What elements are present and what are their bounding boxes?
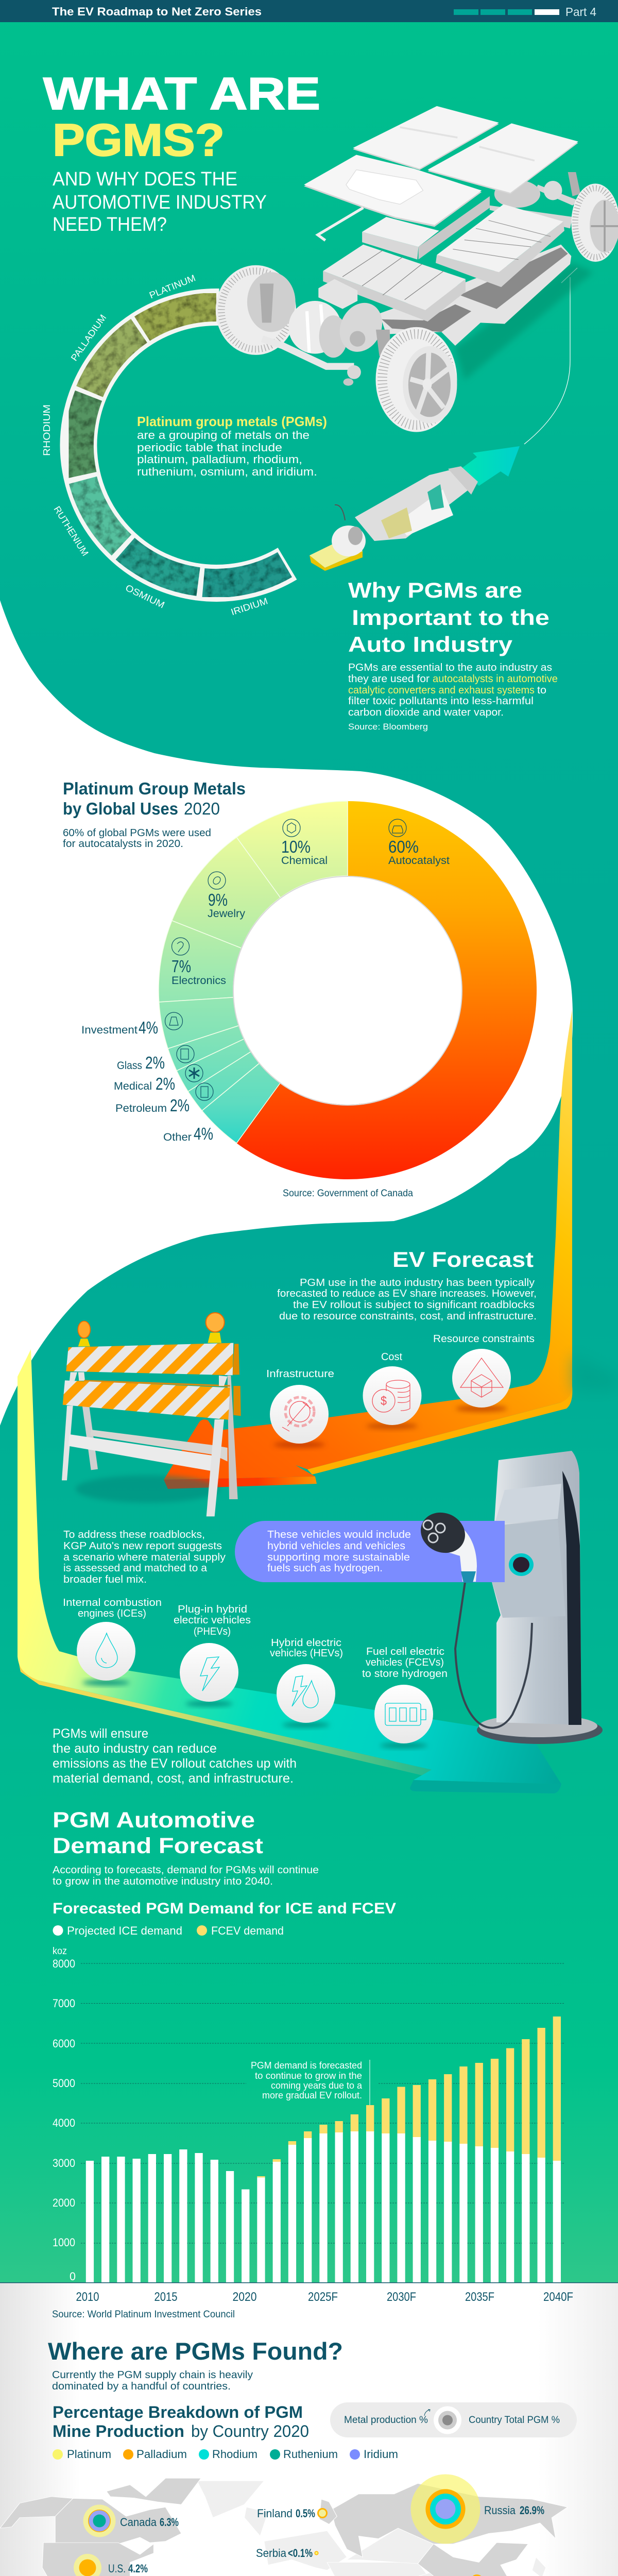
metal labels: IRIDIUM <box>230 596 269 617</box>
slices: other uses <box>159 801 348 1143</box>
bubble: Canada: 6.3% <box>160 2516 179 2529</box>
subtitle: AUTOMOTIVE INDUSTRY <box>53 192 267 213</box>
roadblock: cost <box>363 1351 421 1429</box>
cover panels <box>304 106 578 241</box>
chart annotation <box>251 2060 370 2105</box>
value labels: 10% <box>281 837 311 856</box>
roadblock: resource constraints <box>433 1333 535 1412</box>
body text: why PGMs are important <box>348 662 558 732</box>
highlighted countries <box>0 2478 577 2576</box>
text: address roadblocks: broader fuel mix. <box>63 1574 147 1585</box>
front motor and suspension <box>262 296 391 386</box>
body text: why PGMs are important: filter toxic pollutants into less-harmful <box>348 696 534 707</box>
supply chain text: Currently the PGM supply chain is heavily <box>52 2369 253 2381</box>
metal legend: Rhodium <box>212 2448 258 2461</box>
intro text: what PGMs are <box>137 414 327 478</box>
chart legend: FCEV demand <box>211 1924 284 1937</box>
value labels: 2% <box>170 1096 190 1115</box>
body text: why PGMs are important: Source: Bloomberg <box>348 722 428 732</box>
EV forecast text <box>277 1277 537 1322</box>
text: address roadblocks <box>63 1529 226 1585</box>
x axis labels: 2010 <box>76 2290 99 2304</box>
value labels: Petroleum <box>115 1103 167 1114</box>
y axis labels: 7000 <box>53 1997 75 2010</box>
forecast intro text: According to forecasts, demand for PGMs will continue <box>53 1865 319 1876</box>
text: PGMs will ensure: emissions as the EV rollout catches up with <box>53 1756 297 1771</box>
slice: autocatalyst 60% <box>236 801 537 1179</box>
purple callout: vehicles: supporting more sustainable <box>267 1552 410 1563</box>
body text: why PGMs are important: autocatalysts in automotive <box>433 673 558 685</box>
fuel type: plug-in hybrid: Plug-in hybrid <box>178 1604 247 1615</box>
FCEV bars <box>257 2016 561 2178</box>
bubble: Finland: 0.5% <box>296 2507 315 2520</box>
text: address roadblocks: a scenario where material supply <box>63 1552 226 1563</box>
heading: platinum group metals by use <box>63 779 246 818</box>
chart annotation: coming years due to a <box>271 2080 363 2091</box>
title: PGMS? <box>53 114 225 165</box>
bubble: Russia <box>411 2474 544 2544</box>
heading: platinum group metals by use: by Global Uses <box>63 799 178 818</box>
supply chain text <box>52 2369 253 2392</box>
body text: why PGMs are important: carbon dioxide and water vapor. <box>348 707 504 718</box>
charger plug <box>414 1505 477 1583</box>
metal labels: OSMIUM <box>124 583 166 611</box>
value labels: Chemical <box>281 855 328 867</box>
bubble: Canada: Canada <box>120 2516 157 2529</box>
catalytic converter and arrows <box>310 446 520 571</box>
donut chart: global uses <box>81 801 537 1179</box>
value labels: 2% <box>145 1053 165 1072</box>
x axis labels <box>76 2290 573 2304</box>
x axis labels: 2035F <box>465 2290 494 2304</box>
fuel type: internal combustion engines: engines (ICEs) <box>78 1608 146 1619</box>
EV forecast text: due to resource constraints, cost, and infrastructure. <box>279 1311 537 1322</box>
y axis labels: 6000 <box>53 2037 75 2050</box>
warning lamps <box>78 1313 225 1346</box>
roadblock: cost: Cost <box>381 1351 402 1363</box>
barricade <box>62 1313 241 1516</box>
intro text: what PGMs are: ruthenium, osmium, and iridium. <box>137 465 317 478</box>
icons <box>165 819 406 1100</box>
bubble: Russia: Russia <box>484 2504 516 2517</box>
y axis labels <box>53 1946 76 2283</box>
ribbon: yellow to teal arrow <box>18 1349 561 1793</box>
arrow: teal out <box>461 446 520 486</box>
metal labels: RHODIUM <box>42 404 52 456</box>
bubble: Russia: 26.9% <box>520 2504 544 2517</box>
title: WHAT ARE <box>43 68 320 119</box>
fuel type: hybrid electric: Hybrid electric <box>271 1637 341 1649</box>
heading: why PGMs are important: Important to the <box>352 605 550 630</box>
y axis labels: 3000 <box>53 2157 75 2170</box>
metal labels: PLATINUM <box>148 273 197 301</box>
value labels: 60% <box>388 837 419 856</box>
metal legend: Platinum <box>67 2448 111 2461</box>
forecast intro text <box>53 1865 319 1887</box>
metal labels: RUTHENIUM <box>52 504 91 558</box>
y axis labels: 8000 <box>53 1957 75 1970</box>
text: PGMs will ensure <box>53 1726 297 1786</box>
heading: PGM automotive demand forecast: Demand Forecast <box>53 1834 263 1858</box>
value labels: Glass <box>117 1060 142 1072</box>
fuel type: hybrid electric <box>270 1637 343 1727</box>
progress segments <box>454 9 559 15</box>
value labels: Other <box>163 1131 192 1143</box>
purple callout: vehicles: fuels such as hydrogen. <box>267 1563 383 1574</box>
chart annotation: more gradual EV rollout. <box>262 2090 362 2100</box>
heading: PGM automotive demand forecast <box>53 1808 263 1858</box>
map title: Percentage Breakdown of PGM <box>53 2403 303 2421</box>
fuel type: fuel cell electric: vehicles (FCEVs) <box>366 1657 444 1668</box>
lower section background <box>0 2283 618 2576</box>
heading: why PGMs are important <box>348 578 550 656</box>
bar chart: PGM demand <box>53 1946 564 2283</box>
metal legend: Palladium <box>136 2448 187 2461</box>
x axis labels: 2020 <box>233 2290 256 2304</box>
value labels: 9% <box>208 890 228 909</box>
heading: where are PGMs found: Where are PGMs Found? <box>48 2337 343 2365</box>
metal legend: Ruthenium <box>283 2448 338 2461</box>
donut intro text: for autocatalysts in 2020. <box>63 838 183 850</box>
heading: EV forecast: EV Forecast <box>392 1247 534 1272</box>
y axis labels: 0 <box>70 2270 76 2283</box>
EV forecast text: PGM use in the auto industry has been typically <box>300 1277 535 1289</box>
text: PGMs will ensure: material demand, cost, and infrastructure. <box>53 1771 294 1786</box>
chart annotation: PGM demand is forecasted <box>251 2060 362 2071</box>
forecast intro text: to grow in the automotive industry into 2040. <box>53 1876 273 1887</box>
EV charger <box>455 1451 603 1744</box>
part number: Part 4 <box>565 5 596 19</box>
subtitle: AND WHY DOES THE <box>53 168 237 190</box>
ore ring: six metals <box>42 273 287 617</box>
chart legend: Projected ICE demand <box>67 1924 182 1937</box>
body text: why PGMs are important: to <box>537 685 546 696</box>
chassis illustration <box>216 106 618 432</box>
bubble: U.S.: U.S. <box>108 2562 126 2575</box>
heading: why PGMs are important: Auto Industry <box>348 632 513 656</box>
roadblock: cost: $ <box>381 1394 387 1408</box>
x axis labels: 2040F <box>543 2290 573 2304</box>
value labels: 7% <box>171 957 191 976</box>
fuel type: internal combustion engines <box>63 1597 162 1685</box>
front right wheel <box>375 327 457 432</box>
thin line from chassis to converter <box>524 268 577 444</box>
fuel type: fuel cell electric: to store hydrogen <box>362 1668 448 1680</box>
purple callout: vehicles: These vehicles would include <box>267 1529 411 1540</box>
EV forecast text: the EV rollout is subject to significant roadblocks <box>293 1299 535 1311</box>
converter body <box>332 466 478 556</box>
map title <box>53 2403 309 2441</box>
heading: platinum group metals by use: Platinum Group Metals <box>63 779 246 798</box>
title <box>43 68 320 165</box>
chart source: Source: World Platinum Investment Council <box>52 2309 235 2320</box>
text: PGMs will ensure: PGMs will ensure <box>53 1726 148 1741</box>
bubble: Canada <box>83 2505 179 2537</box>
purple callout: vehicles: hybrid vehicles and vehicles <box>267 1540 405 1552</box>
bubble: Serbia: Serbia <box>256 2547 287 2560</box>
fuel type: internal combustion engines: Internal combustion <box>63 1597 162 1608</box>
roadblock: resource constraints: Resource constraints <box>433 1333 535 1345</box>
front left wheel <box>216 265 296 355</box>
body text: why PGMs are important: they are used for <box>348 673 430 685</box>
text: address roadblocks: KGP Auto's new report suggests <box>63 1540 222 1552</box>
fuel type: fuel cell electric: Fuel cell electric <box>366 1646 444 1657</box>
intro text: what PGMs are: are a grouping of metals on the <box>137 429 310 442</box>
arrow: yellow in <box>310 533 363 571</box>
x axis labels: 2030F <box>387 2290 416 2304</box>
text: PGMs will ensure: the auto industry can reduce <box>53 1741 217 1756</box>
y axis labels: 2000 <box>53 2196 75 2209</box>
metal labels: PALLADIUM <box>69 313 108 363</box>
chart legend <box>53 1924 284 1937</box>
fuel type: hybrid electric: vehicles (HEVs) <box>270 1648 343 1659</box>
donut source: Source: Government of Canada <box>283 1188 413 1199</box>
body text: why PGMs are important: PGMs are essential to the auto industry as <box>348 662 552 673</box>
y axis labels: 4000 <box>53 2116 75 2129</box>
map title: Mine Production <box>53 2422 184 2441</box>
bubble key: Metal production % <box>344 2415 428 2426</box>
value labels: Medical <box>114 1080 152 1092</box>
bubble: Serbia <box>256 2547 318 2560</box>
map title: by Country 2020 <box>191 2422 309 2441</box>
world map <box>0 2478 609 2576</box>
subtitle <box>53 168 267 235</box>
metal legend <box>53 2448 398 2461</box>
fuel type: fuel cell electric <box>362 1646 448 1748</box>
x axis labels: 2025F <box>308 2290 338 2304</box>
bubble: China <box>470 2574 538 2576</box>
roadblock: infrastructure: Infrastructure <box>266 1368 334 1380</box>
value labels: Jewelry <box>208 908 246 920</box>
bubble: Finland: Finland <box>257 2507 293 2520</box>
intro text: what PGMs are: platinum, palladium, rhodium, <box>137 453 302 466</box>
value labels: Electronics <box>171 975 226 987</box>
EV forecast text: forecasted to reduce as EV share increases. However, <box>277 1288 537 1299</box>
heading: platinum group metals by use: 2020 <box>184 799 220 818</box>
supply chain text: dominated by a handful of countries. <box>52 2381 231 2392</box>
value labels: Autocatalyst <box>388 855 450 867</box>
heading: PGM automotive demand forecast: PGM Automotive <box>53 1808 255 1833</box>
bubble: Finland <box>257 2507 328 2520</box>
value labels <box>81 837 450 1143</box>
intro text: what PGMs are: periodic table that include <box>137 441 282 454</box>
subtitle: NEED THEM? <box>53 214 167 235</box>
background: white curved panel <box>0 600 573 1426</box>
value labels: 2% <box>156 1074 175 1093</box>
fuel type: plug-in hybrid: (PHEVs) <box>194 1626 231 1637</box>
body text: why PGMs are important: catalytic converters and exhaust systems <box>348 685 535 696</box>
value labels: Investment <box>81 1024 138 1036</box>
bubble: Serbia: <0.1% <box>288 2547 313 2560</box>
value labels: 4% <box>194 1124 213 1143</box>
metal labels <box>42 273 269 617</box>
fuel type: plug-in hybrid: electric vehicles <box>174 1615 251 1626</box>
purple callout: vehicles <box>235 1521 505 1582</box>
metal legend: Iridium <box>364 2448 398 2461</box>
ribbon: yellow to orange arrow <box>164 1010 618 1489</box>
series title: The EV Roadmap to Net Zero Series <box>52 5 262 18</box>
y axis labels: 1000 <box>53 2236 75 2249</box>
text: address roadblocks: To address these roadblocks, <box>63 1529 205 1540</box>
bubble: U.S. <box>74 2554 148 2576</box>
heading: why PGMs are important: Why PGMs are <box>348 578 522 602</box>
y axis labels: 5000 <box>53 2077 75 2090</box>
y axis labels: koz <box>53 1946 67 1957</box>
text: address roadblocks: is assessed and matched to a <box>63 1563 208 1574</box>
bubble: U.S.: 4.2% <box>128 2562 148 2575</box>
donut intro text: 60% of global PGMs were used <box>63 827 211 839</box>
chart annotation: to continue to grow in the <box>255 2071 362 2081</box>
ICE bars <box>86 2131 561 2283</box>
header bar <box>0 0 618 22</box>
chart title: Forecasted PGM Demand for ICE and FCEV <box>53 1900 396 1917</box>
bubble key: Country Total PGM % <box>469 2415 560 2426</box>
x axis labels: 2015 <box>154 2290 177 2304</box>
bubble key <box>330 2402 577 2437</box>
donut intro text <box>63 827 211 850</box>
roadblock: infrastructure <box>266 1368 334 1448</box>
fuel type: plug-in hybrid <box>174 1604 251 1706</box>
battery modules <box>318 196 564 321</box>
value labels: 4% <box>139 1018 158 1037</box>
intro text: what PGMs are: Platinum group metals (PGMs) <box>137 414 327 429</box>
